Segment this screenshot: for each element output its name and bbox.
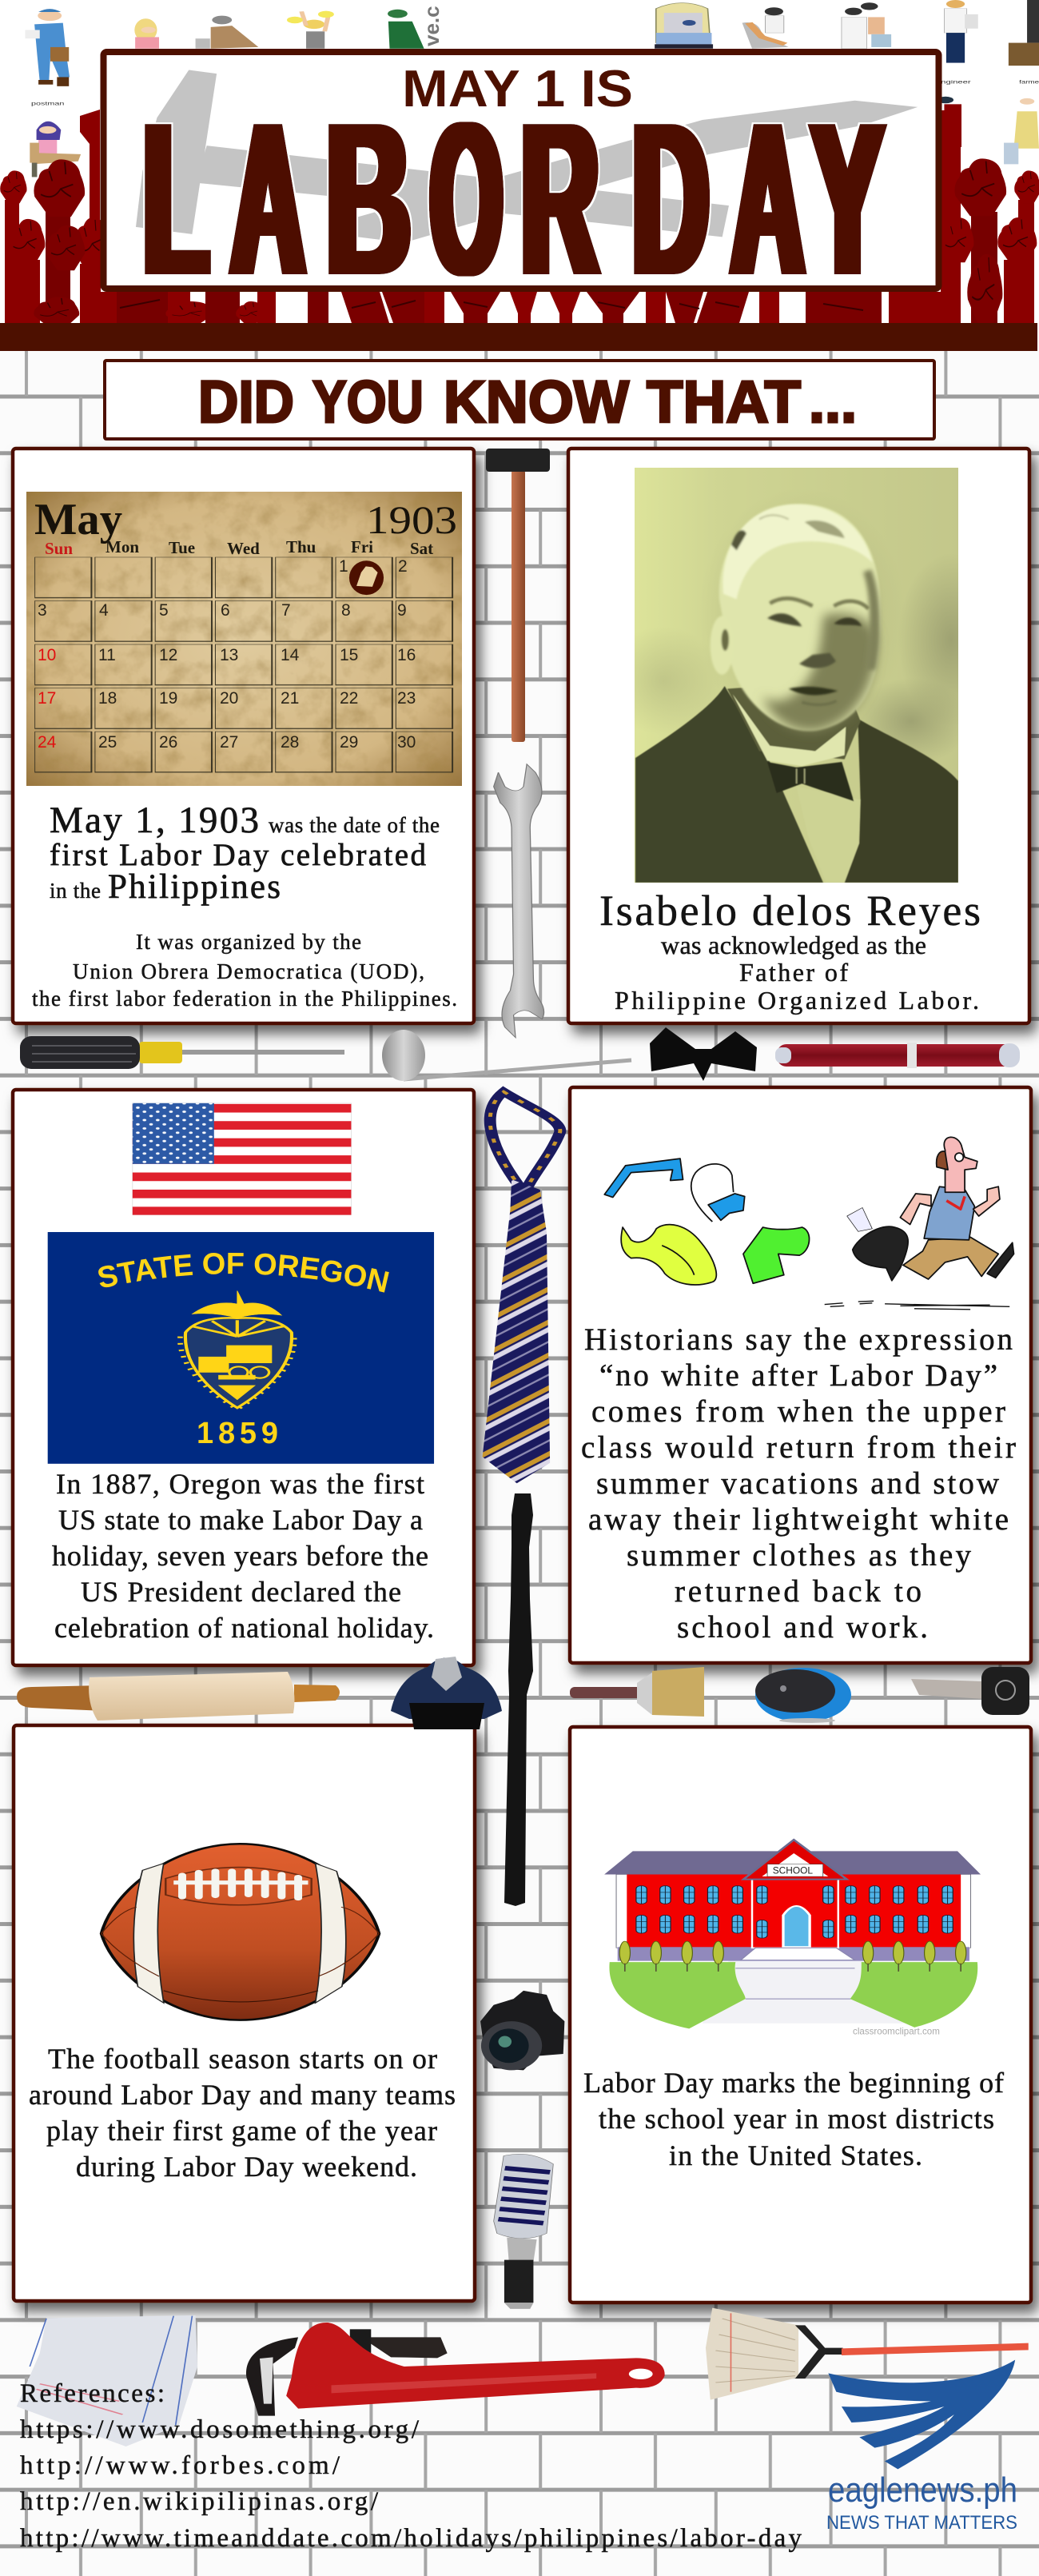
icon: swim goggles	[691, 1164, 745, 1222]
text: father of labor: Philippine Organized Labor.	[615, 986, 979, 1015]
calendar image: 6	[221, 601, 230, 620]
dark band	[0, 323, 1037, 351]
panel: school	[570, 1727, 1031, 2303]
subtitle panel	[105, 361, 934, 439]
watermark vertical text: ve.c	[420, 6, 444, 46]
calendar image: 5	[159, 601, 169, 620]
icon: farmer	[1009, 0, 1039, 66]
icon: mop	[706, 2308, 1029, 2400]
icon: car key	[911, 1667, 1029, 1715]
oregon flag text: STATE OF OREGON	[98, 1253, 389, 1293]
text: historians: summer clothes as they	[627, 1538, 972, 1573]
title: labor day: A	[731, 78, 804, 321]
title panel	[104, 52, 938, 321]
title: may 1 is: MAY 1 IS	[402, 59, 633, 118]
calendar image: 1903	[366, 497, 457, 542]
title: labor day: R	[521, 76, 599, 321]
text: football: around Labor Day and many teams	[29, 2079, 456, 2111]
school illustration	[604, 1840, 981, 2037]
icon: pen	[775, 1043, 1020, 1068]
icon: dentist	[742, 7, 789, 49]
text: historians: “no white after Labor Day”	[599, 1358, 997, 1393]
text: historians: comes from when the upper	[591, 1394, 1005, 1429]
hair	[723, 504, 873, 600]
calendar image	[26, 492, 462, 786]
text: oregon: US state to make Labor Day a	[58, 1504, 423, 1536]
calendar badge	[349, 560, 384, 595]
calendar image: Wed	[227, 539, 260, 558]
title: labor day: L	[143, 76, 209, 321]
text: union obrera democratica	[32, 930, 457, 1011]
text: historians	[581, 1322, 1016, 1645]
calendar image: 27	[220, 733, 238, 752]
calendar image: 29	[340, 733, 358, 752]
calendar image: Mon	[105, 537, 139, 556]
facial features	[767, 598, 869, 704]
calendar image: 1	[339, 557, 348, 576]
title: labor day: B	[326, 78, 411, 321]
raised fists behind header	[0, 110, 1039, 326]
text: football: The football season starts on or	[48, 2043, 437, 2075]
icon: running man	[847, 1137, 1013, 1281]
fists right	[941, 110, 1039, 324]
text: school: the school year in most districts	[599, 2103, 994, 2135]
calendar image: Sat	[410, 539, 433, 558]
text: football: play their first game of the year	[46, 2115, 437, 2147]
calendar image: 12	[159, 646, 177, 664]
oregon flag text	[98, 1253, 389, 1450]
text: school: Labor Day marks the beginning of	[583, 2067, 1004, 2099]
calendar image: 22	[340, 689, 358, 708]
text: father of labor: was acknowledged as the	[661, 931, 926, 959]
head base: forehead and cheek	[711, 504, 881, 731]
icon: police baton	[504, 1493, 533, 1906]
text: oregon: holiday, seven years before the	[52, 1540, 428, 1572]
calendar image: Thu	[286, 537, 316, 556]
icon: camera	[480, 1991, 564, 2070]
references: http://www.forbes.com/	[20, 2451, 340, 2480]
icon: woman figure	[937, 97, 961, 169]
icon: yellow swim ring	[621, 1225, 716, 1285]
subtitle: did you know that: YOU	[312, 369, 424, 435]
icon: photographer	[196, 16, 258, 49]
subtitle: did you know that: THAT	[647, 369, 801, 435]
calendar image: 9	[397, 601, 407, 620]
text: may 1 1903: Philippines	[108, 868, 281, 906]
logo wing	[828, 2360, 1015, 2469]
calendar image: 15	[340, 646, 358, 664]
subtitle: did you know that: KNOW	[444, 369, 629, 435]
calendar image: 25	[98, 733, 117, 752]
title: labor day: A	[231, 78, 305, 321]
face shading	[762, 613, 877, 732]
panel: oregon	[6, 1087, 491, 1685]
subtitle: did you know that: ...	[809, 369, 857, 435]
calendar image: 26	[159, 733, 177, 752]
text: may 1 1903: was the date of the	[269, 813, 440, 837]
icon: soldier	[388, 10, 424, 49]
football illustration	[102, 1844, 379, 2020]
text: school	[583, 2067, 1004, 2171]
calendar image: 20	[220, 689, 238, 708]
calendar image: 17	[38, 689, 56, 708]
calendar image: 10	[38, 646, 56, 664]
references: http://en.wikipilipinas.org/	[20, 2487, 379, 2516]
icon: ladle	[382, 1030, 631, 1081]
text: oregon: celebration of national holiday.	[54, 1612, 434, 1644]
calendar image: 28	[281, 733, 299, 752]
icon: nurse	[134, 18, 159, 49]
label: engineer: ngineer	[941, 79, 971, 85]
title: labor day: O	[431, 78, 502, 321]
text: oregon: US President declared the	[81, 1576, 401, 1608]
references	[20, 2379, 802, 2553]
icon: student at desk	[30, 122, 81, 177]
panel: first labor day	[13, 449, 474, 1023]
calendar image: 18	[98, 689, 117, 708]
icon: performer	[287, 11, 334, 49]
calendar image: 13	[220, 646, 238, 664]
text: may 1 1903: first Labor Day celebrated	[50, 838, 427, 872]
subtitle: did you know that	[198, 369, 857, 435]
text: oregon	[52, 1468, 434, 1644]
calendar image: May	[34, 495, 122, 544]
text: father of labor	[615, 931, 979, 1015]
icon: towel	[17, 2315, 197, 2446]
title: labor day: D	[632, 78, 709, 321]
icon: school bus	[655, 3, 713, 49]
icon: pipe wrench	[246, 2323, 665, 2416]
text: union obrera democratica: It was organized by the	[136, 930, 361, 954]
school illustration: SCHOOL	[773, 1864, 813, 1876]
title: labor day: Y	[811, 77, 884, 321]
clothes and running man cartoon	[604, 1137, 1013, 1310]
calendar image: Tue	[169, 538, 195, 557]
icon: microphone	[494, 2154, 553, 2309]
icon: baker	[1004, 98, 1039, 164]
text: historians: class would return from their	[581, 1430, 1016, 1465]
icon: computer mouse	[755, 1668, 851, 1723]
text: father of labor: Father of	[739, 958, 848, 987]
text: may 1 1903: May 1, 1903	[50, 800, 259, 841]
oregon flag text: 1859	[197, 1417, 278, 1450]
occupations clip art strip	[26, 0, 1039, 177]
icon: bow tie	[650, 1027, 757, 1081]
icon: rolling pin	[17, 1672, 340, 1721]
calendar image: 23	[397, 689, 416, 708]
fists left	[0, 110, 109, 326]
text: may 1 1903	[50, 800, 440, 906]
text: may 1 1903: in the	[50, 879, 101, 903]
school illustration: classroomclipart.com	[853, 2025, 940, 2037]
icon: screwdriver	[20, 1036, 344, 1069]
icon: wrench	[494, 764, 544, 1038]
text: football	[29, 2043, 456, 2183]
calendar image: 14	[281, 646, 300, 664]
calendar image: 21	[281, 689, 299, 708]
text: isabelo name: Isabelo delos Reyes	[599, 887, 981, 935]
text: union obrera democratica: the first labor federation in the Philippines.	[32, 987, 457, 1011]
icon: engineer	[944, 0, 978, 63]
logo wordmark: eaglenews.ph	[828, 2470, 1017, 2510]
calendar image: 16	[397, 646, 416, 664]
calendar image: Fri	[351, 537, 373, 556]
calendar image: 19	[159, 689, 177, 708]
references: https://www.dosomething.org/	[20, 2415, 420, 2444]
panel: football	[14, 1725, 475, 2301]
text: oregon: In 1887, Oregon was the first	[56, 1468, 424, 1500]
calendar image: 4	[99, 601, 109, 620]
eagle news logo	[826, 2360, 1017, 2534]
calendar image: 8	[341, 601, 351, 620]
panel: no white after labor day	[570, 1087, 1031, 1663]
calendar image: Sun	[45, 539, 73, 558]
text: historians: school and work.	[677, 1610, 928, 1645]
icon: sledgehammer	[486, 449, 550, 742]
icon: sunglasses	[604, 1158, 683, 1198]
text: historians: returned back to	[675, 1574, 922, 1609]
calendar image: 24	[38, 733, 57, 752]
text: historians: away their lightweight white	[588, 1502, 1009, 1537]
white header background	[0, 0, 1039, 352]
us flag	[133, 1103, 351, 1215]
text: union obrera democratica: Union Obrera Democratica (UOD),	[73, 959, 424, 983]
references: http://www.timeanddate.com/holidays/philippines/labor-day	[20, 2524, 802, 2553]
subtitle: did you know that: DID	[198, 369, 294, 435]
icon: paint brush	[570, 1667, 704, 1717]
motion lines	[825, 1301, 1009, 1310]
icon: necktie	[483, 1092, 560, 1483]
text: historians: Historians say the expression	[584, 1322, 1013, 1357]
fists under header	[101, 292, 941, 324]
icon: doctor	[842, 2, 891, 49]
calendar image: 3	[38, 601, 47, 620]
calendar image: 7	[281, 601, 291, 620]
text: school: in the United States.	[669, 2139, 922, 2171]
calendar image: 2	[398, 557, 408, 576]
calendar image: 11	[98, 646, 116, 664]
label: postman: postman	[31, 101, 64, 106]
title: labor day	[143, 76, 884, 321]
portrait photo	[635, 468, 958, 883]
oregon flag field	[48, 1232, 434, 1464]
text: historians: summer vacations and stow	[596, 1466, 999, 1501]
oregon seal	[180, 1290, 294, 1409]
references: References:	[20, 2379, 165, 2408]
calendar image: 30	[397, 733, 416, 752]
icon: police cap	[391, 1657, 502, 1729]
panel: isabelo delos reyes	[568, 449, 1029, 1023]
icon: green shirt	[743, 1227, 810, 1283]
text: football: during Labor Day weekend.	[76, 2151, 417, 2183]
icon: postman	[26, 9, 70, 86]
logo tagline: NEWS THAT MATTERS	[826, 2512, 1017, 2534]
watermark: crossed tools	[136, 70, 918, 243]
